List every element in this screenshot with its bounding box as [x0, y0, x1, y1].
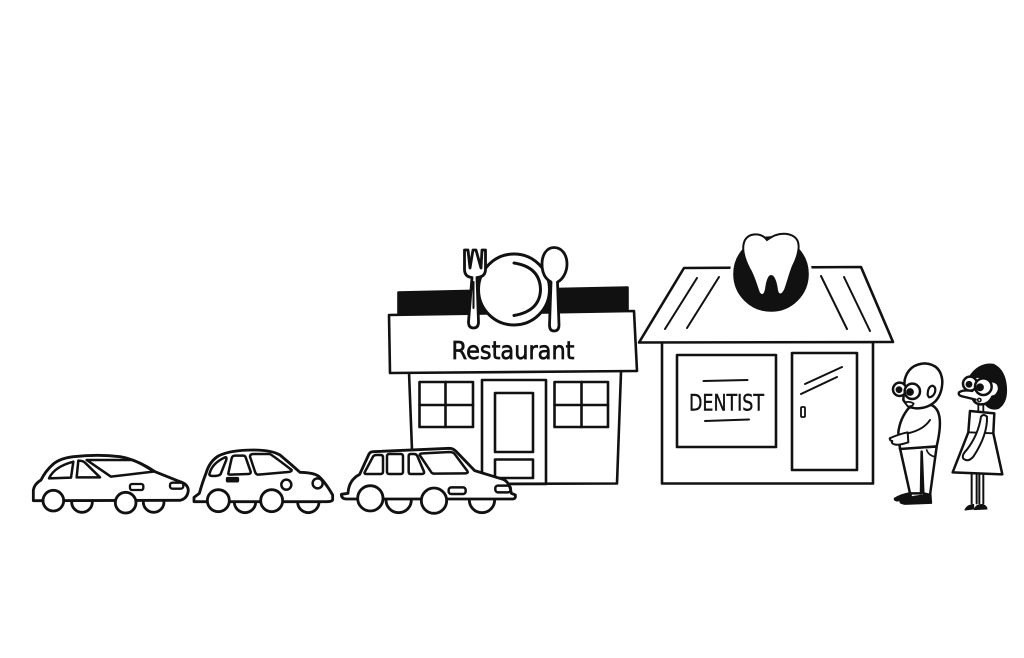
restaurant sign board [389, 311, 637, 373]
car 1 body [33, 455, 188, 501]
restaurant building [389, 248, 637, 484]
man torso [898, 405, 940, 449]
woman arm [963, 415, 987, 460]
man ear [928, 386, 935, 397]
roof lines [665, 276, 870, 331]
dentist door [792, 353, 857, 470]
car 2 body [194, 450, 333, 502]
restaurant name: Restaurant [452, 336, 575, 365]
man legs [900, 447, 937, 495]
dentist building [639, 233, 893, 484]
man hand [890, 432, 908, 445]
dentist walls [662, 342, 873, 484]
woman mouth [978, 398, 981, 402]
man head [903, 363, 942, 408]
man mouth [905, 402, 914, 406]
icon: fork [464, 250, 486, 328]
left window [420, 382, 473, 427]
woman shoes [965, 504, 987, 510]
icon: tooth badge [730, 233, 812, 315]
car 2 [194, 450, 333, 513]
right window [554, 382, 608, 427]
person: man [890, 363, 942, 504]
man shoes [894, 492, 912, 501]
woman nose [959, 390, 976, 400]
woman legs [972, 474, 983, 503]
woman hair [971, 365, 1006, 408]
icon: spoon [542, 248, 567, 331]
car 1 [33, 455, 188, 513]
icon: plate [478, 254, 550, 325]
woman eyes [963, 377, 977, 391]
roof band [398, 288, 628, 316]
man eyes [893, 383, 906, 396]
dentist label: DENTIST [689, 392, 764, 416]
restaurant door [482, 380, 546, 484]
woman face [968, 377, 999, 404]
woman dress [953, 411, 1002, 474]
dentist roof [639, 267, 893, 342]
car 3 body [341, 448, 515, 499]
woman neck [978, 404, 983, 411]
restaurant walls [409, 372, 621, 484]
dentist window sign [677, 355, 776, 447]
car 3 [341, 448, 515, 513]
person: woman [953, 365, 1006, 510]
